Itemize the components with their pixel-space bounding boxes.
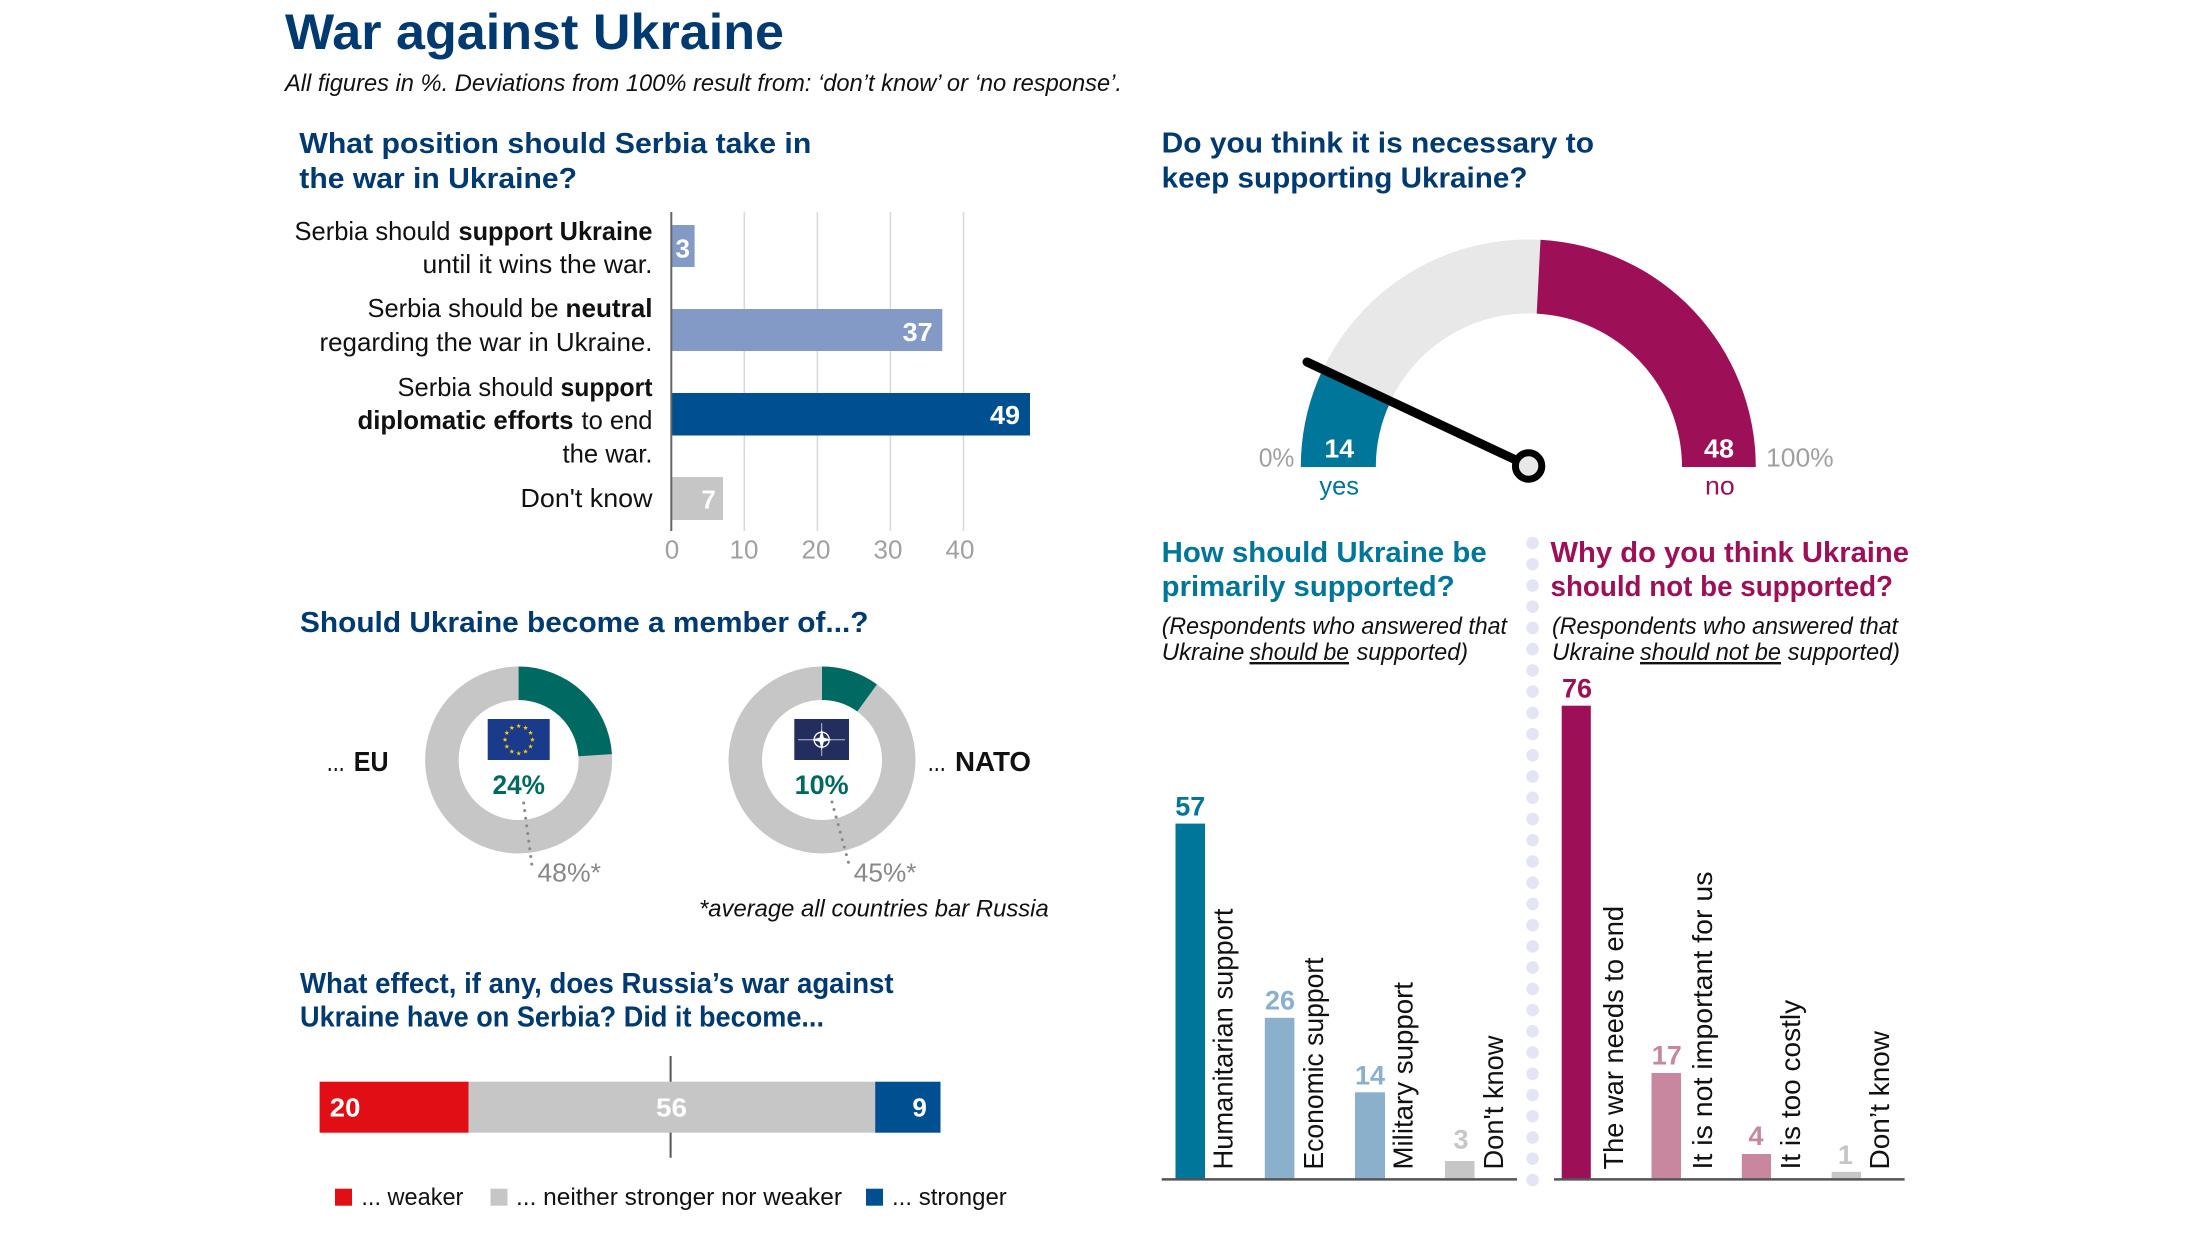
NATO average leader — [832, 802, 848, 862]
rotated labels — [1208, 908, 1509, 1170]
title: War against Ukraine — [285, 4, 784, 60]
bar values: 49 — [990, 400, 1020, 430]
yes value: 14 — [1324, 434, 1355, 464]
axis labels: 10 — [730, 535, 758, 565]
category labels: neutral — [566, 293, 652, 323]
scale minimum: 0% — [1259, 443, 1294, 473]
panel: EU and NATO membership — [300, 607, 1049, 923]
subheading: supported) — [1788, 639, 1900, 666]
rotated labels: It is not important for us — [1687, 872, 1718, 1170]
axis labels: 30 — [874, 535, 902, 565]
EU average value: 48%* — [537, 858, 601, 888]
bar values: 1 — [1838, 1140, 1853, 1170]
category labels: until it wins the war. — [422, 249, 652, 279]
category labels — [294, 216, 653, 513]
category labels: support Ukraine — [458, 216, 652, 246]
dotted divider — [1526, 537, 1539, 1186]
panel: how Ukraine should be supported — [1162, 537, 1517, 1179]
rotated labels: The war needs to end — [1598, 906, 1629, 1170]
heading: What position should Serbia take in — [299, 128, 811, 160]
axis labels — [665, 535, 974, 565]
no label: no — [1705, 470, 1735, 500]
rotated labels: It is too costly — [1775, 1000, 1806, 1170]
vertical axis — [670, 212, 672, 531]
category labels: Serbia should — [294, 216, 450, 246]
subheading: (Respondents who answered that — [1552, 613, 1899, 640]
bar values: 26 — [1265, 986, 1295, 1016]
panel: why Ukraine should not be supported — [1550, 537, 1909, 1179]
gauge arcs — [1301, 239, 1756, 467]
bars — [672, 225, 1030, 520]
bar values: 3 — [1453, 1125, 1469, 1155]
bar values — [1562, 674, 1853, 1170]
bar values — [1175, 792, 1469, 1155]
subheading: Ukraine — [1552, 639, 1635, 666]
bar values: 57 — [1175, 792, 1205, 822]
category labels: regarding the war in Ukraine. — [320, 327, 652, 357]
NATO value: 10% — [795, 770, 849, 800]
subheading: should not be — [1640, 639, 1781, 666]
heading: Why do you think Ukraine — [1550, 537, 1909, 569]
heading: Ukraine have on Serbia? Did it become... — [300, 1002, 824, 1034]
heading: keep supporting Ukraine? — [1162, 162, 1528, 194]
baseline — [1162, 1178, 1517, 1181]
rotated labels: Economic support — [1298, 957, 1329, 1170]
rotated labels: Humanitarian support — [1208, 908, 1238, 1170]
bar values: 9 — [912, 1093, 927, 1123]
category labels: the war. — [562, 438, 652, 468]
bar values: 3 — [676, 234, 690, 264]
subheading: Ukraine — [1162, 639, 1244, 666]
legend: ... stronger — [892, 1184, 1007, 1211]
bar values: 4 — [1748, 1121, 1764, 1151]
bar values — [330, 1093, 927, 1123]
gridlines — [744, 212, 964, 531]
NATO label: NATO — [955, 746, 1031, 777]
bar values: 20 — [330, 1093, 360, 1123]
panel: effect on Serbia stacked bar — [300, 968, 1007, 1211]
heading — [1550, 537, 1909, 603]
subheading — [1162, 613, 1508, 666]
legend — [335, 1184, 1007, 1211]
centre tick — [670, 1056, 672, 1158]
bar values: 14 — [1355, 1061, 1385, 1091]
heading: the war in Ukraine? — [299, 163, 577, 195]
rotated labels — [1598, 872, 1895, 1170]
category labels: diplomatic efforts — [358, 405, 574, 435]
EU average leader — [524, 803, 532, 864]
bar values: 56 — [656, 1093, 687, 1123]
heading — [1162, 537, 1487, 603]
heading — [1162, 127, 1594, 194]
NATO average value: 45%* — [854, 858, 916, 888]
subheading: (Respondents who answered that — [1162, 613, 1508, 640]
heading: Should Ukraine become a member of...? — [300, 607, 868, 639]
category labels: Serbia should — [398, 372, 554, 402]
bar values: 76 — [1562, 674, 1592, 704]
heading: Do you think it is necessary to — [1162, 127, 1594, 159]
gauge needle — [1307, 362, 1542, 479]
footnote: *average all countries bar Russia — [699, 896, 1049, 923]
bar values: 7 — [701, 485, 716, 515]
no value: 48 — [1704, 434, 1734, 464]
heading: What effect, if any, does Russia’s war against — [300, 968, 894, 1000]
subheading: supported) — [1357, 639, 1468, 666]
panel: Serbia position bar chart — [294, 128, 1030, 565]
EU label: EU — [354, 746, 388, 777]
subheading: should be — [1250, 639, 1349, 666]
heading: How should Ukraine be — [1162, 537, 1487, 569]
legend: ... neither stronger nor weaker — [516, 1184, 842, 1211]
category labels: to end — [582, 405, 652, 435]
bar values: 17 — [1652, 1041, 1682, 1071]
scale maximum: 100% — [1766, 443, 1834, 473]
yes label: yes — [1319, 470, 1359, 500]
EU label — [327, 746, 388, 777]
rotated labels: Don’t know — [1864, 1030, 1895, 1170]
bars — [1176, 824, 1474, 1179]
EU label: ... — [327, 746, 345, 777]
subheading — [1552, 613, 1900, 666]
rotated labels: Military support — [1388, 982, 1418, 1170]
bars — [1562, 706, 1861, 1179]
legend: ... weaker — [361, 1184, 463, 1211]
NATO donut — [745, 666, 899, 837]
category labels: support — [560, 372, 653, 402]
heading: should not be supported? — [1550, 571, 1893, 603]
panel: gauge — [1162, 127, 1834, 501]
axis labels: 20 — [802, 535, 830, 565]
icon: EU flag — [488, 719, 550, 760]
heading: primarily supported? — [1162, 571, 1455, 603]
subtitle: All figures in %. Deviations from 100% result from: ‘don’t know’ or ‘no response’. — [283, 70, 1122, 97]
stacked bar — [320, 1082, 941, 1133]
baseline — [1554, 1178, 1905, 1181]
heading — [300, 968, 894, 1034]
EU value: 24% — [492, 770, 545, 800]
bar values: 37 — [903, 317, 933, 347]
axis labels: 40 — [946, 535, 974, 565]
icon: NATO flag — [794, 719, 849, 760]
heading — [299, 128, 811, 195]
category labels: Serbia should be — [368, 293, 558, 323]
EU donut — [442, 666, 612, 837]
category labels: Don't know — [520, 483, 653, 513]
bar values — [676, 234, 1020, 515]
NATO label: ... — [928, 746, 946, 777]
rotated labels: Don't know — [1478, 1035, 1509, 1170]
axis labels: 0 — [665, 535, 679, 565]
